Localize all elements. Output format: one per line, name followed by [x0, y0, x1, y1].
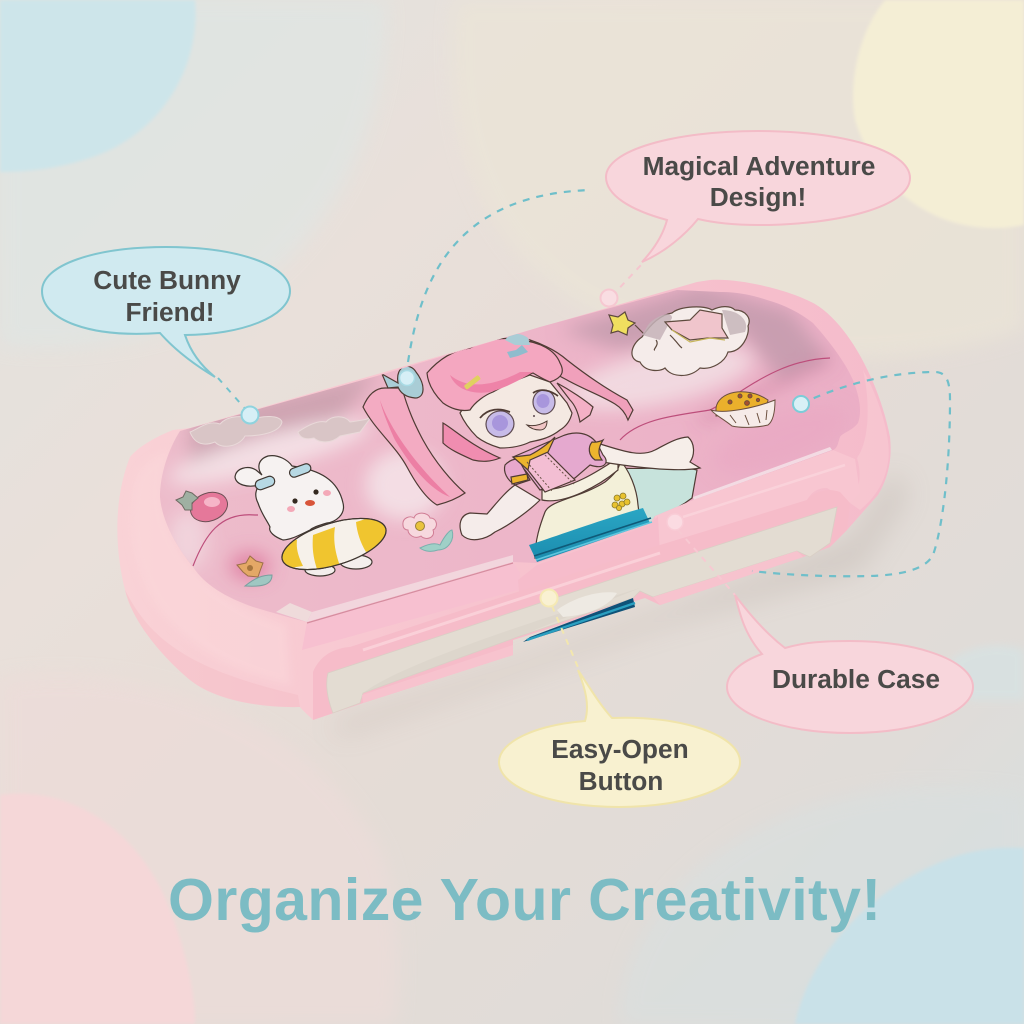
dashed connector: bow to magical bubble: [408, 190, 590, 362]
title: Organize Your Creativity!: [168, 867, 881, 933]
blue strip in gap: [523, 598, 635, 642]
lid middle: [518, 516, 660, 605]
dashed connector: bunny: [218, 378, 248, 412]
band highlight: [557, 592, 617, 617]
end cap highlight left: [130, 450, 290, 685]
lid lip right: [655, 450, 860, 550]
case body: [117, 280, 891, 720]
bunny: [235, 456, 395, 580]
callout: Magical Adventure Design: [606, 131, 910, 262]
ponytail: [363, 388, 465, 505]
dashed connector: durable: [678, 530, 735, 595]
bodice: [513, 433, 606, 490]
right end cap: [850, 370, 889, 510]
sleeve cuffs: [589, 440, 603, 460]
easy-open blue button: [529, 508, 652, 562]
hair strand right: [530, 340, 633, 420]
hair cap: [427, 338, 562, 411]
end cap shading: [125, 590, 300, 707]
nose mouth: [533, 415, 535, 417]
marker dot: panel: [793, 396, 809, 412]
pink flower: [403, 513, 453, 551]
callout: Cute Bunny Friend: Friend!: [125, 297, 215, 327]
marker dot: magical: [600, 290, 618, 306]
panel lower reflection: [307, 555, 513, 622]
callout: Easy-Open Button: [499, 670, 740, 807]
lid lip left tab: [302, 562, 520, 650]
apron flower: [612, 493, 630, 511]
dashed connector: easy open: [552, 606, 580, 672]
cupcake: [711, 392, 775, 427]
callout: Easy-Open Button: Button: [579, 766, 663, 796]
marker dot: bow: [400, 370, 414, 386]
callout: Cute Bunny Friend: [42, 247, 290, 377]
apron: [535, 458, 640, 558]
marker dot: durable: [667, 514, 683, 530]
dashed connector: panel to durable bubble: [752, 372, 950, 576]
hair clip: [464, 375, 481, 390]
callout: Durable Case: [727, 595, 973, 733]
callout: Durable Case: Durable Case: [772, 664, 940, 694]
callout: Cute Bunny Friend: Cute Bunny: [93, 265, 241, 295]
latch frame: [313, 490, 850, 720]
face: [460, 375, 572, 448]
marker dot: bunny: [242, 406, 258, 424]
strawberry: [175, 490, 228, 522]
lower pink strips: [362, 645, 513, 703]
callout: Magical Adventure Design: Magical Adventure: [643, 151, 875, 181]
dashed connector: magical: [612, 264, 642, 296]
beige latch band: [327, 507, 837, 713]
clouds left: [190, 416, 372, 446]
bow top: [505, 334, 530, 345]
left strand under face: [443, 423, 500, 461]
back arm and hand: [460, 485, 540, 540]
collar: [513, 437, 555, 470]
panel shading and art: [164, 285, 854, 622]
eyes: [485, 410, 515, 438]
panel corner bevel: [276, 603, 312, 622]
band inner shade: [363, 588, 640, 693]
star and cloud: [609, 307, 749, 376]
lace: [527, 455, 574, 491]
callout: Magical Adventure Design: Design!: [710, 182, 806, 212]
blue skirt: [626, 468, 698, 527]
case shadow: [330, 470, 908, 735]
pencil case: [117, 280, 891, 720]
marker dot: easy open: [540, 590, 558, 606]
callout: Easy-Open Button: Easy-Open: [551, 734, 689, 764]
girl: [363, 334, 700, 558]
bow left: [382, 366, 423, 398]
panel: [160, 290, 860, 622]
right arm: [597, 437, 700, 470]
small orange flower: [237, 556, 272, 586]
